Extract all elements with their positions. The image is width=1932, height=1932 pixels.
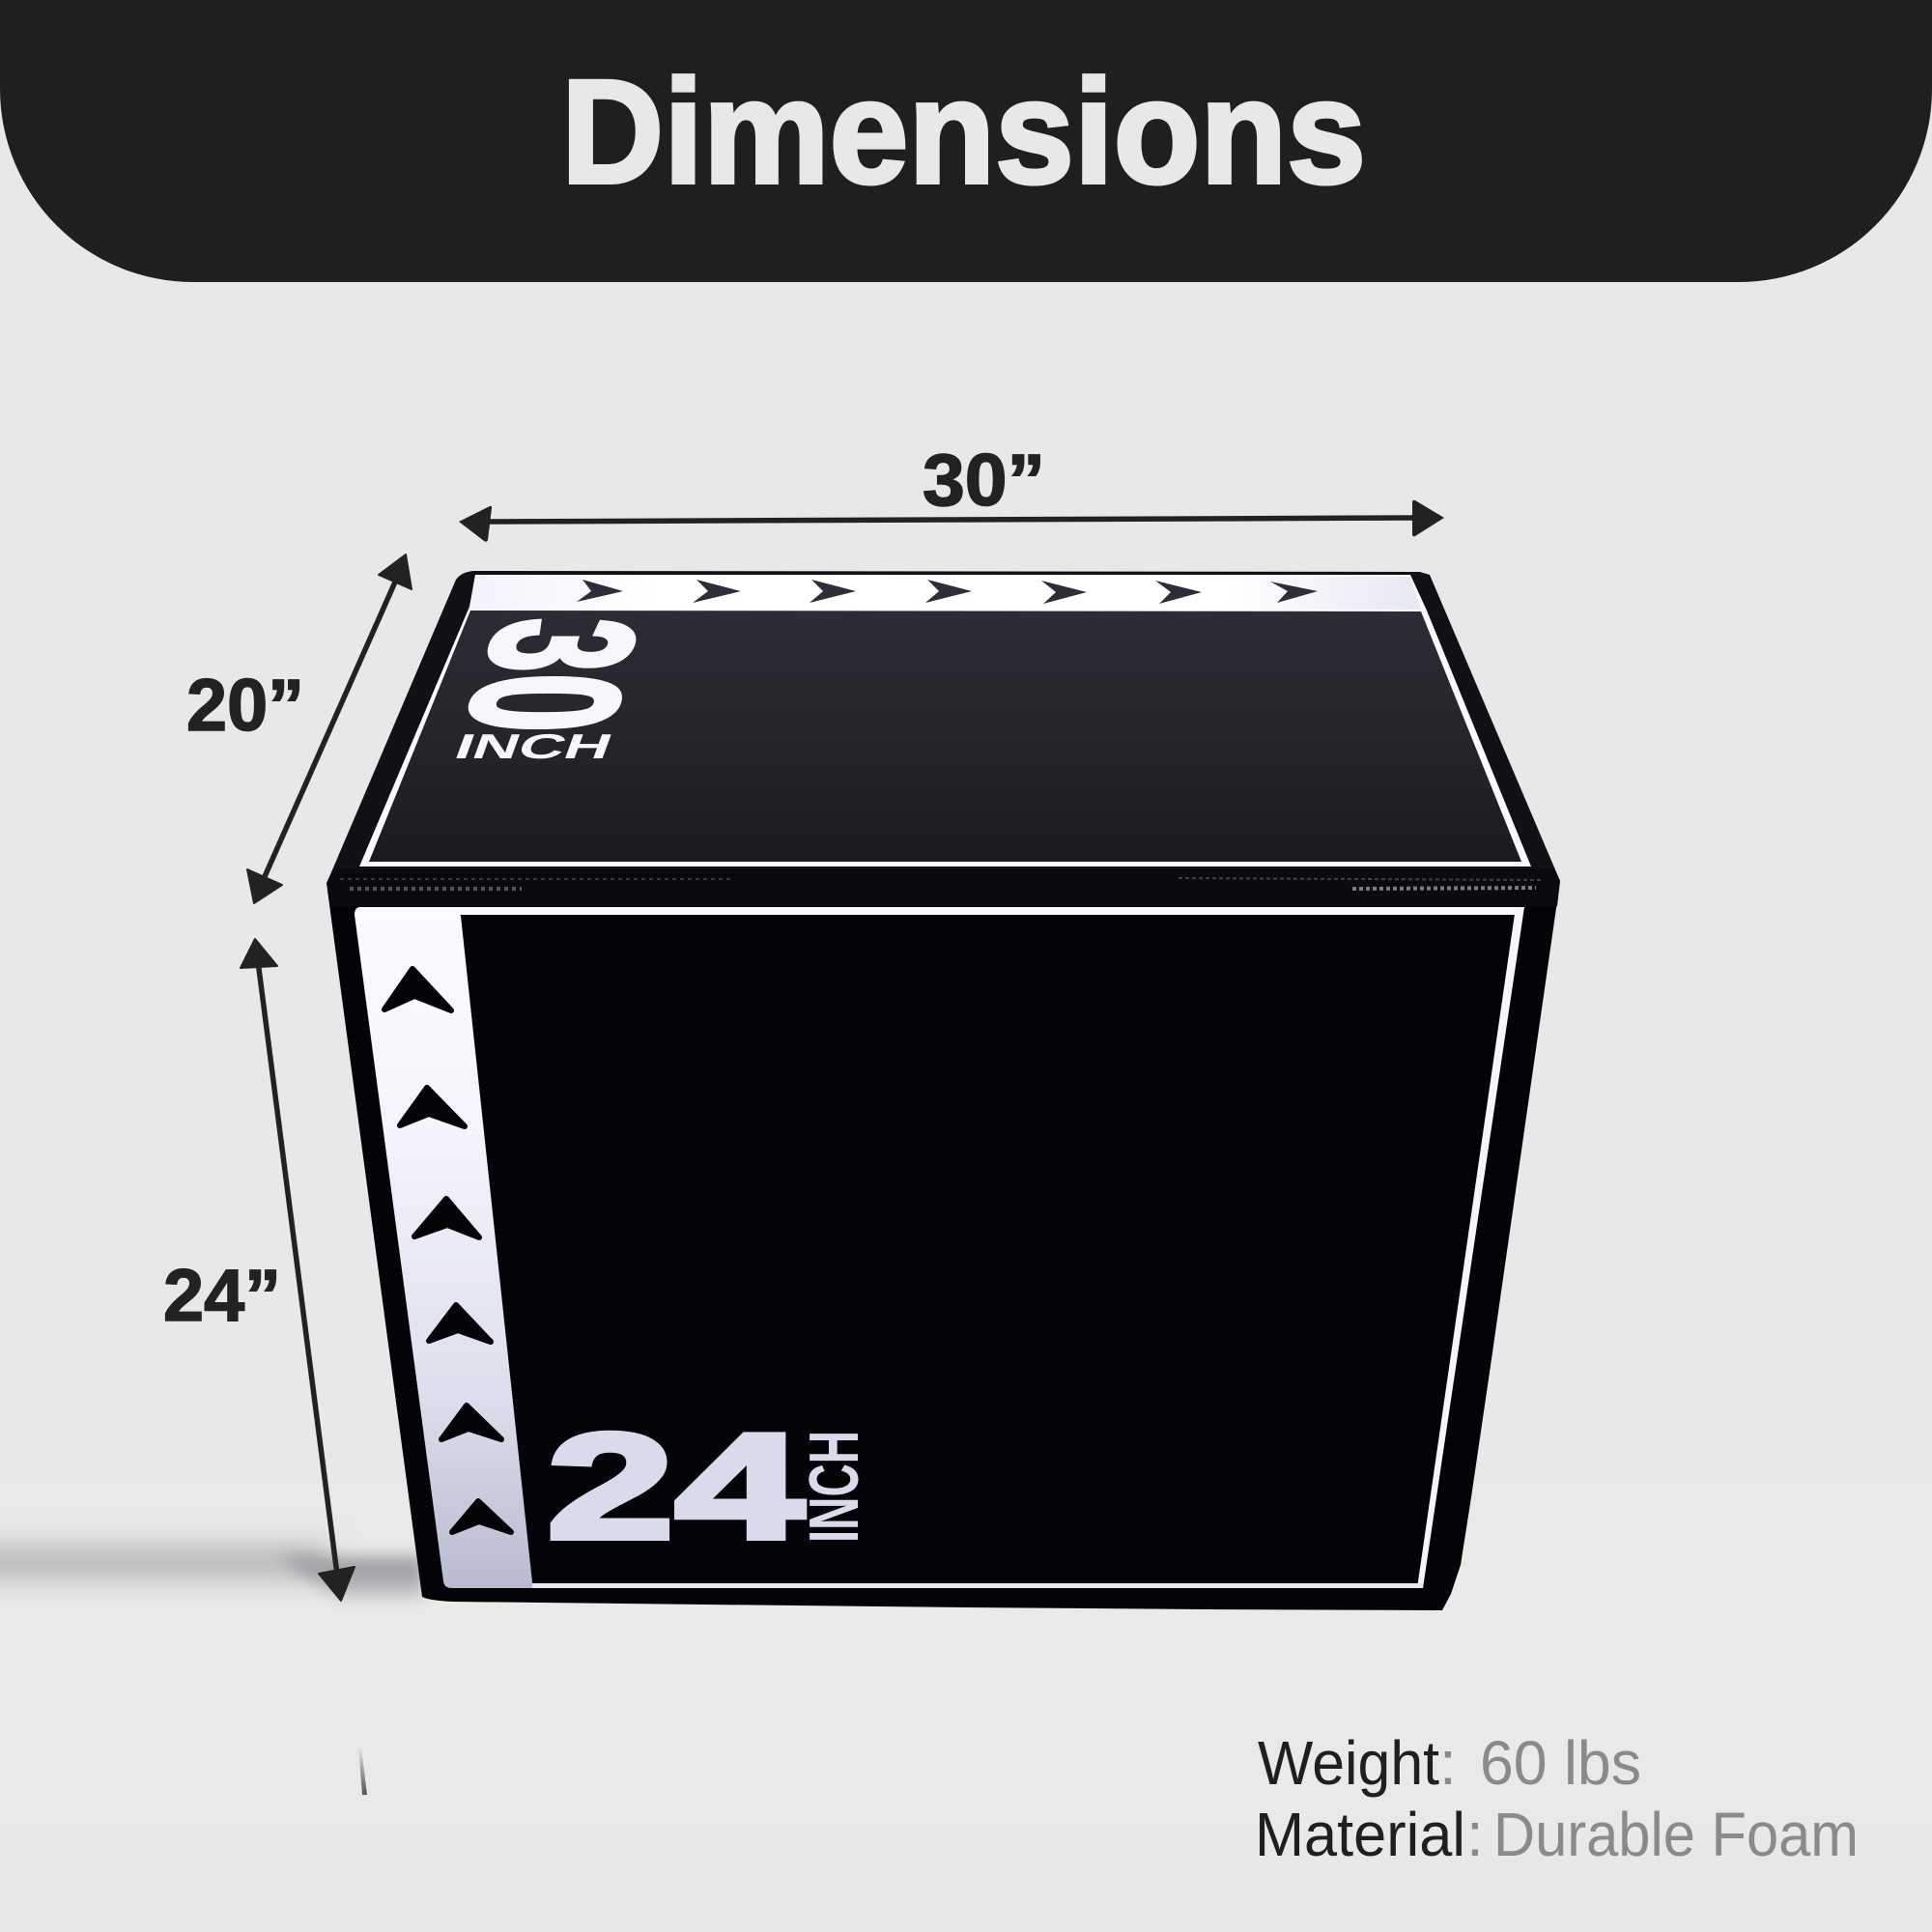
floor shadow [0, 1546, 425, 1600]
box front face [327, 868, 1560, 1610]
weight line: Weight [1258, 1728, 1439, 1798]
label: 24 inch: 24” [163, 1255, 281, 1337]
white frame right line [1417, 907, 1524, 1588]
weight line [1258, 1728, 1641, 1798]
white frame bottom line [532, 1583, 1423, 1588]
plyo box product [327, 571, 1560, 1610]
top number 30 [419, 618, 681, 732]
seam stitching left [340, 879, 734, 889]
arrow: 30 inch width [459, 500, 1444, 542]
ribbon above front face [327, 868, 1560, 906]
white arrow band [469, 575, 1421, 610]
front strip arrows [384, 969, 511, 1532]
top number 30: 3 [442, 618, 681, 672]
top band arrows [577, 580, 1318, 604]
material line: : [1466, 1800, 1484, 1869]
header banner [0, 0, 1932, 282]
front number 24 [547, 1403, 804, 1570]
white frame [359, 575, 1531, 867]
stray tick mark [358, 1747, 367, 1795]
label: 30 inch: 30” [923, 440, 1045, 522]
white left strip [355, 907, 532, 1588]
seam stitching right [1179, 878, 1542, 889]
weight line: : [1439, 1728, 1457, 1798]
arrow: 24 inch height [241, 939, 355, 1601]
front number 24: 2 [547, 1403, 674, 1570]
top number 30: 0 [419, 673, 670, 732]
front INCH label: INCH [796, 1431, 873, 1543]
dark top panel [369, 611, 1521, 862]
material line: Material [1255, 1800, 1465, 1869]
white frame top line [359, 907, 1524, 915]
front number 24: 4 [675, 1403, 804, 1570]
label: 20 inch: 20” [186, 665, 304, 747]
weight line: 60 lbs [1480, 1728, 1641, 1798]
title: Dimensions [561, 49, 1366, 214]
box top face [328, 571, 1560, 894]
material line [1255, 1800, 1859, 1869]
material line: Durable Foam [1493, 1800, 1859, 1869]
arrow: 20 inch depth [247, 554, 412, 903]
specifications text [1255, 1728, 1859, 1869]
top INCH label: INCH [449, 726, 618, 766]
